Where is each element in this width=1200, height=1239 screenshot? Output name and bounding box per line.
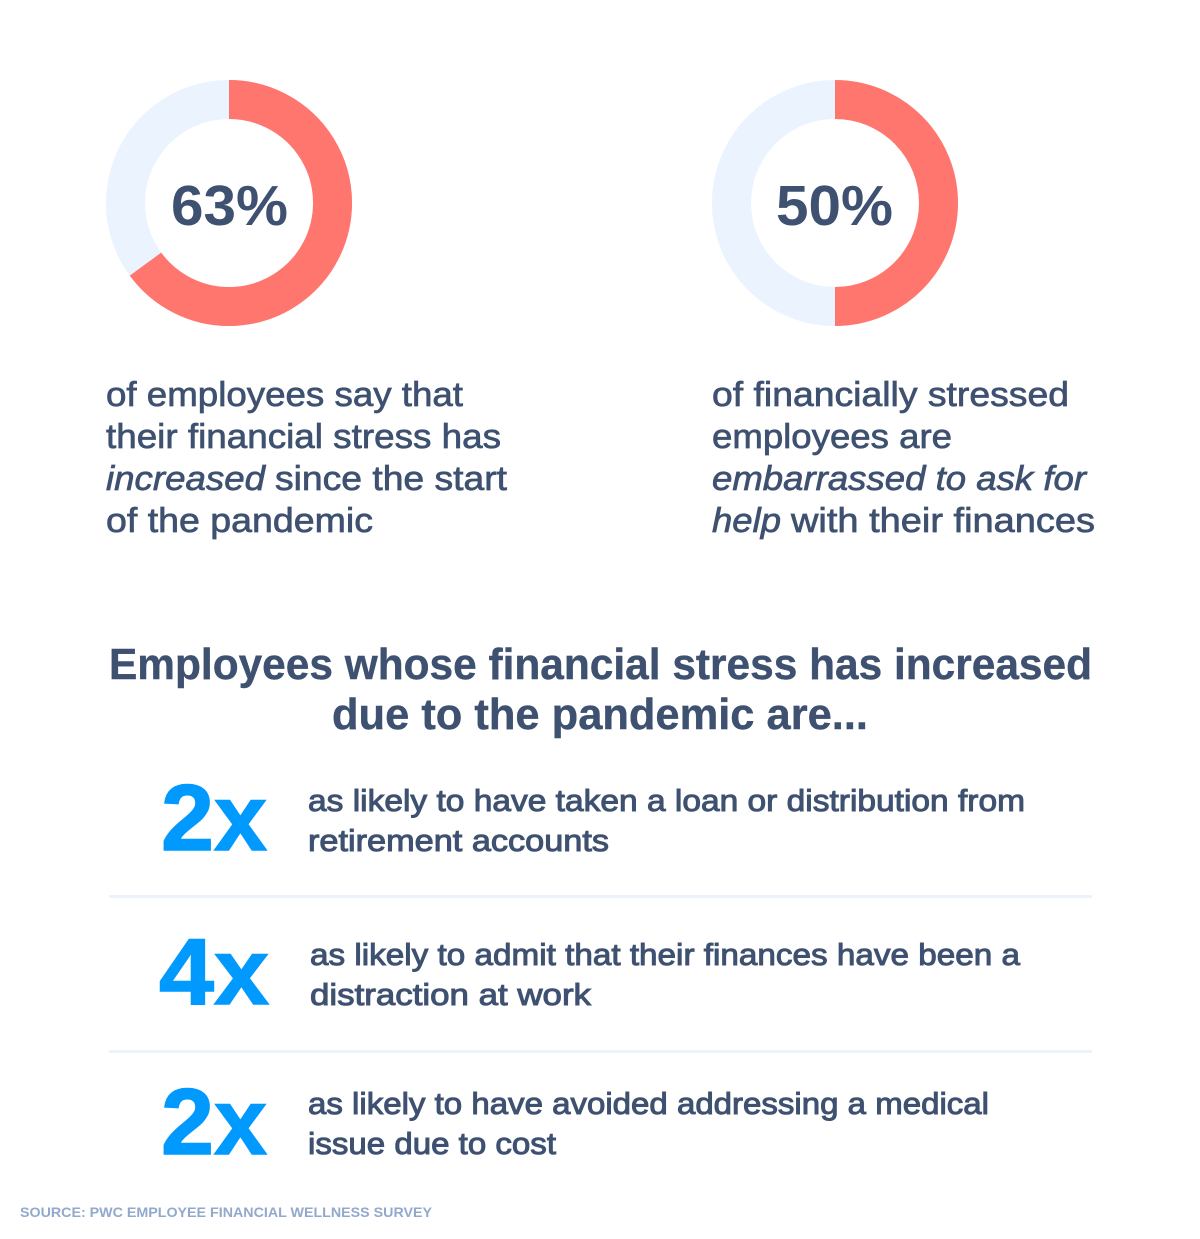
- heading: Employees whose financial stress has increased: [109, 640, 1092, 689]
- row: 2x medical issue: 2x: [161, 1069, 267, 1174]
- source note: SOURCE: PWC EMPLOYEE FINANCIAL WELLNESS SURVEY: [20, 1204, 433, 1220]
- row: 4x distraction at work: distraction at work: [310, 977, 592, 1012]
- text block: 63% description: [106, 376, 508, 540]
- row: 4x distraction at work: as likely to admit that their finances have been a: [310, 937, 1021, 972]
- row: 2x medical issue: issue due to cost: [308, 1126, 556, 1161]
- text block: 50% description: embarrassed to ask for: [712, 460, 1088, 498]
- donut chart: 63%: 63%: [171, 174, 288, 238]
- text block: 63% description: of employees say that: [106, 376, 464, 414]
- row: 4x distraction at work: [159, 919, 1021, 1024]
- panel: 50% statistic: [712, 100, 1095, 540]
- row: 2x retirement accounts: [161, 765, 1025, 870]
- text block: 63% description: since the start: [275, 460, 508, 498]
- row: 2x retirement accounts: as likely to have taken a loan or distribution from: [308, 783, 1025, 818]
- text block: 50% description: help: [712, 502, 781, 540]
- text block: 50% description: [712, 376, 1095, 540]
- row: 2x retirement accounts: 2x: [161, 765, 267, 870]
- heading: [109, 640, 1092, 739]
- text block: 63% description: their financial stress has: [106, 418, 501, 456]
- text block: 50% description: of financially stressed: [712, 376, 1069, 414]
- row: 2x medical issue: as likely to have avoided addressing a medical: [308, 1086, 989, 1121]
- row: 4x distraction at work: 4x: [159, 919, 269, 1024]
- donut chart: 50%: [732, 100, 938, 306]
- panel: 63% statistic: [106, 99, 508, 540]
- row: 2x retirement accounts: retirement accounts: [308, 823, 609, 858]
- text block: 50% description: with their finances: [790, 502, 1095, 540]
- text block: 63% description: increased: [106, 460, 266, 498]
- donut chart: 50%: 50%: [776, 174, 893, 238]
- heading: due to the pandemic are...: [332, 690, 868, 739]
- row: 2x medical issue: [161, 1069, 989, 1174]
- donut chart: 63%: [126, 99, 333, 306]
- text block: 63% description: of the pandemic: [106, 502, 373, 540]
- text block: 50% description: employees are: [712, 418, 952, 456]
